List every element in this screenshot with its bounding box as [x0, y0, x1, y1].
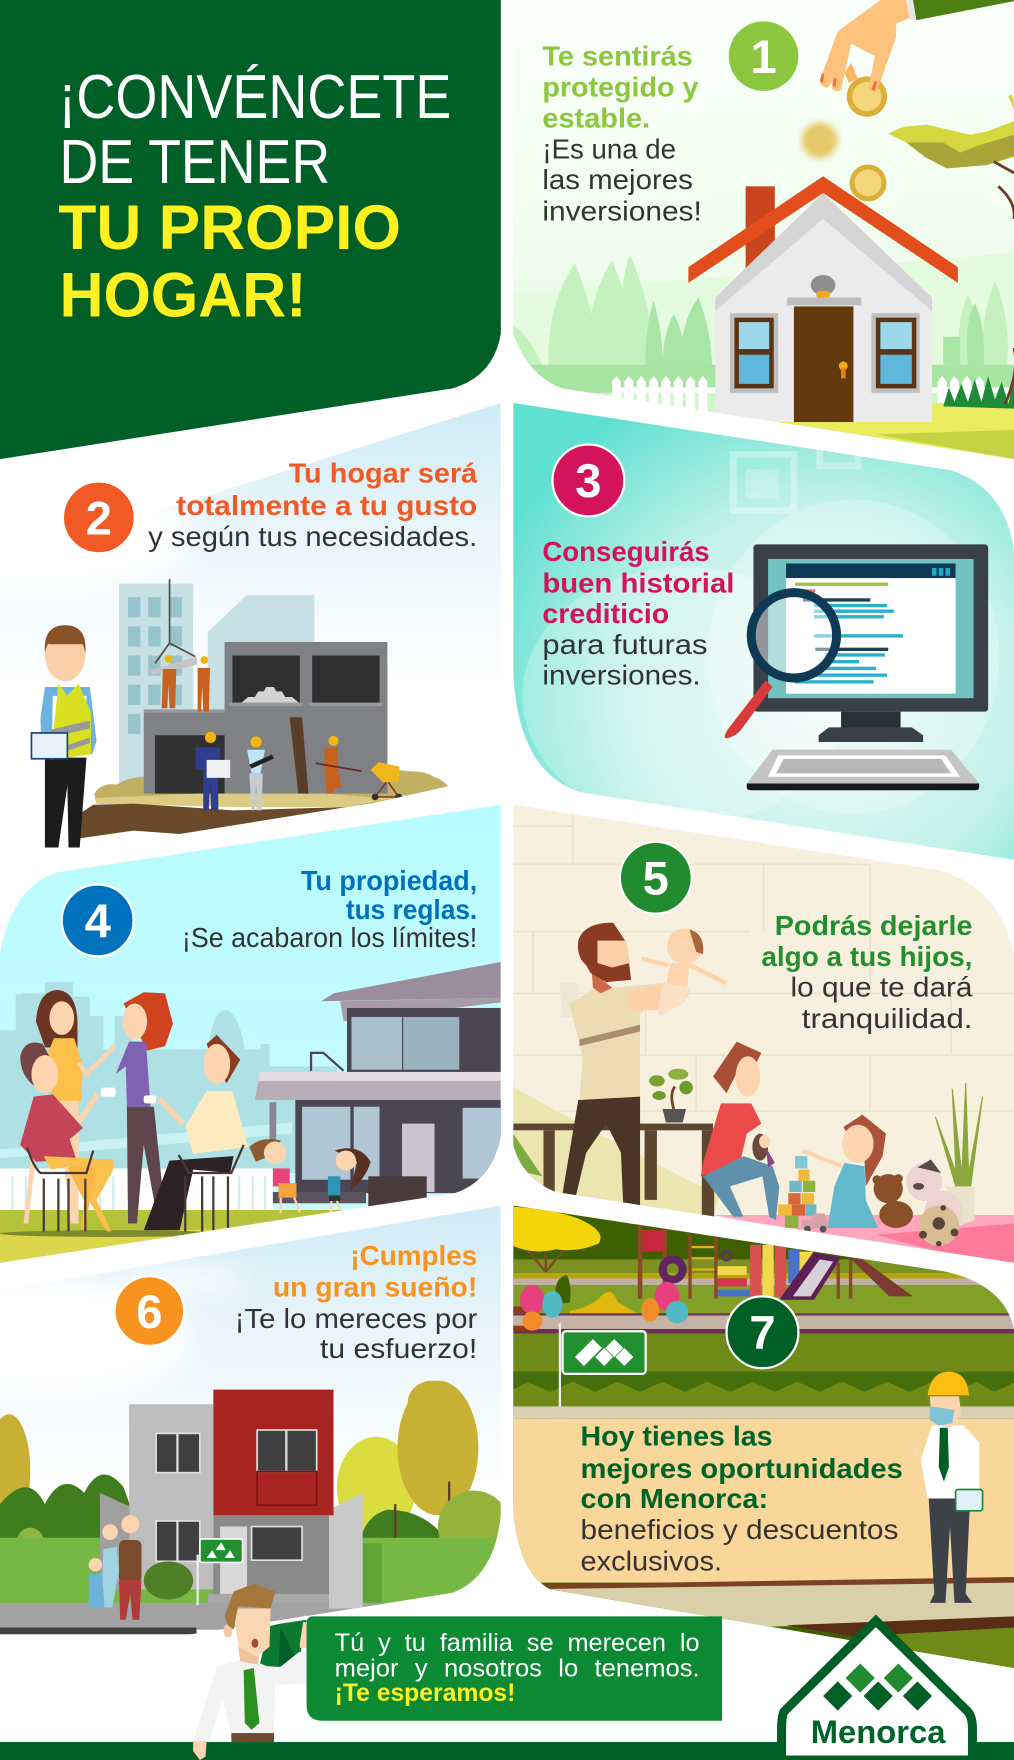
sign — [545, 1323, 646, 1458]
chair left — [27, 1147, 93, 1231]
text block 5 — [761, 910, 973, 1034]
badge 5 — [620, 842, 692, 914]
city silhouette — [0, 982, 337, 1173]
garden scene — [0, 962, 501, 1268]
magnifier — [725, 680, 773, 738]
text block 1: protegido y — [542, 72, 699, 103]
balloons — [520, 1282, 688, 1331]
blocks — [778, 1156, 816, 1228]
keyboard — [747, 750, 979, 790]
plant and pot — [935, 1083, 983, 1226]
badge 5: 5 — [643, 852, 669, 905]
text block 3 — [542, 536, 734, 691]
text block 7: con Menorca: — [581, 1483, 768, 1514]
kids — [249, 1139, 300, 1213]
badge 2 — [63, 482, 135, 553]
title: tu propio hogar: HOGAR! — [60, 261, 307, 331]
text block 1: las mejores — [542, 164, 693, 195]
text block 4: ¡Se acabaron los límites! — [182, 922, 477, 953]
text block 7 — [581, 1421, 903, 1576]
text block 1: inversiones! — [542, 196, 702, 227]
text block 4 — [182, 865, 477, 953]
text block 6: tu esfuerzo! — [320, 1333, 477, 1364]
icon: house — [688, 176, 958, 422]
pavement — [513, 1406, 1014, 1419]
bonsai — [649, 1069, 693, 1122]
badge 1 — [729, 21, 798, 91]
badge 4: 4 — [85, 894, 111, 947]
badge 3 — [552, 444, 624, 516]
panel 5: leave something to your children — [513, 805, 1014, 1266]
family — [89, 1515, 141, 1620]
bench — [513, 1307, 533, 1331]
doll — [752, 1134, 768, 1161]
family scene — [513, 923, 983, 1246]
bushes — [555, 1275, 571, 1303]
girl — [802, 1115, 886, 1228]
chair right — [179, 1145, 244, 1231]
park scene — [513, 1207, 1014, 1672]
callout: closing message — [307, 1616, 722, 1721]
text block 1: ¡Es una de — [542, 133, 676, 164]
bushes — [144, 1561, 193, 1599]
toy car — [802, 1213, 829, 1232]
badge 6: 6 — [136, 1285, 162, 1338]
flag behind hand — [259, 1620, 307, 1667]
icon: hand dropping coin — [820, 0, 1014, 92]
text block 3: buen historial — [542, 568, 734, 599]
fence — [612, 376, 1010, 411]
fence — [0, 1168, 273, 1210]
footer bar — [0, 1742, 1014, 1760]
text block 5: tranquilidad. — [802, 1003, 972, 1034]
text block 6 — [235, 1240, 477, 1364]
logo: Menorca: Menorca — [811, 1714, 946, 1750]
text block 4: tus reglas. — [346, 894, 477, 925]
table — [513, 1124, 713, 1130]
pink floor — [713, 1215, 1014, 1266]
supervisor man — [31, 625, 97, 847]
title: tu propio hogar — [58, 193, 401, 331]
text block 2: totalmente a tu gusto — [176, 490, 477, 521]
speakers — [368, 1176, 427, 1207]
text block 3: crediticio — [542, 598, 669, 629]
text block 2: Tu hogar será — [289, 458, 478, 489]
panel: title — [0, 0, 501, 459]
grass — [0, 1538, 501, 1605]
lawn — [0, 1210, 344, 1263]
callout: closing message: Tú y tu familia se merecen lo — [335, 1630, 700, 1657]
title: convéncete de tener — [58, 63, 451, 197]
text block 5: Podrás dejarle — [775, 910, 972, 941]
callout: closing message: ¡Te esperamos! — [335, 1680, 515, 1707]
text block 1: Te sentirás — [542, 41, 693, 72]
badge 2: 2 — [86, 491, 112, 544]
text block 7: mejores oportunidades — [581, 1453, 903, 1484]
text block 6: ¡Te lo mereces por — [235, 1303, 477, 1334]
title: tu propio hogar: TU PROPIO — [58, 193, 401, 263]
text block 1: estable. — [542, 103, 650, 134]
father — [563, 1094, 640, 1206]
pavement — [208, 1594, 382, 1616]
neighbourhood scene — [0, 1381, 510, 1634]
workers — [162, 655, 362, 810]
text block 2 — [148, 458, 478, 552]
text block 6: ¡Cumples — [350, 1240, 477, 1271]
text block 7: exclusivos. — [581, 1545, 722, 1576]
icon: coins — [802, 76, 887, 201]
panel 3: credit history — [513, 403, 1014, 874]
badge 6 — [115, 1276, 184, 1346]
text block 5: algo a tus hijos, — [761, 941, 972, 972]
text block 7: Hoy tienes las — [581, 1421, 773, 1452]
badge 7 — [727, 1296, 798, 1368]
football — [919, 1205, 959, 1246]
text block 7: beneficios y descuentos — [581, 1514, 898, 1545]
text block 2: y según tus necesidades. — [148, 521, 477, 552]
panel 7: best opportunities with Menorca — [513, 1206, 1014, 1677]
presenter man — [193, 1584, 316, 1760]
house — [129, 1404, 213, 1589]
mother — [713, 1042, 761, 1093]
playground — [638, 1225, 913, 1300]
grass — [943, 376, 1014, 409]
title: convéncete de tener: ¡CONVÉNCETE — [58, 63, 451, 132]
ground — [719, 398, 1014, 459]
text block 3: para futuras — [542, 629, 707, 660]
bear — [873, 1174, 913, 1228]
badge 1: 1 — [750, 30, 777, 83]
yellow tree — [522, 1244, 567, 1272]
badge 7: 7 — [749, 1306, 776, 1359]
text block 3: inversiones. — [542, 660, 701, 691]
man red seated — [20, 1042, 50, 1086]
panel 4: your property, your rules — [0, 805, 501, 1268]
panel 1: protected and stable — [513, 0, 1014, 459]
logo: Menorca — [782, 1621, 972, 1760]
woman purple — [124, 992, 173, 1051]
crane and beam — [155, 579, 195, 663]
title: convéncete de tener: DE TENER — [60, 128, 330, 197]
house — [321, 962, 501, 1001]
text block 6: un gran sueño! — [273, 1271, 477, 1302]
text block 4: Tu propiedad, — [301, 865, 477, 896]
callout: closing message: mejor y nosotros lo tenemos. — [335, 1655, 700, 1682]
construction scene — [31, 579, 451, 847]
trees — [0, 1414, 30, 1527]
text block 1 — [542, 41, 702, 227]
icon: computer and magnifier — [725, 544, 988, 790]
panel 2: to your taste — [0, 403, 501, 874]
woman yellow — [24, 1100, 79, 1223]
text block 3: Conseguirás — [542, 536, 710, 567]
dog — [906, 1159, 962, 1236]
sign — [198, 1539, 243, 1605]
panel 6: you fulfil a dream — [0, 1206, 510, 1677]
badge 3: 3 — [575, 454, 602, 507]
man cream seated — [207, 1035, 240, 1083]
badge 4 — [62, 884, 134, 956]
text block 5: lo que te dará — [791, 972, 973, 1003]
engineer — [904, 1372, 983, 1603]
baby — [641, 928, 727, 1016]
cement mixer — [371, 762, 402, 800]
tree — [888, 121, 1014, 168]
